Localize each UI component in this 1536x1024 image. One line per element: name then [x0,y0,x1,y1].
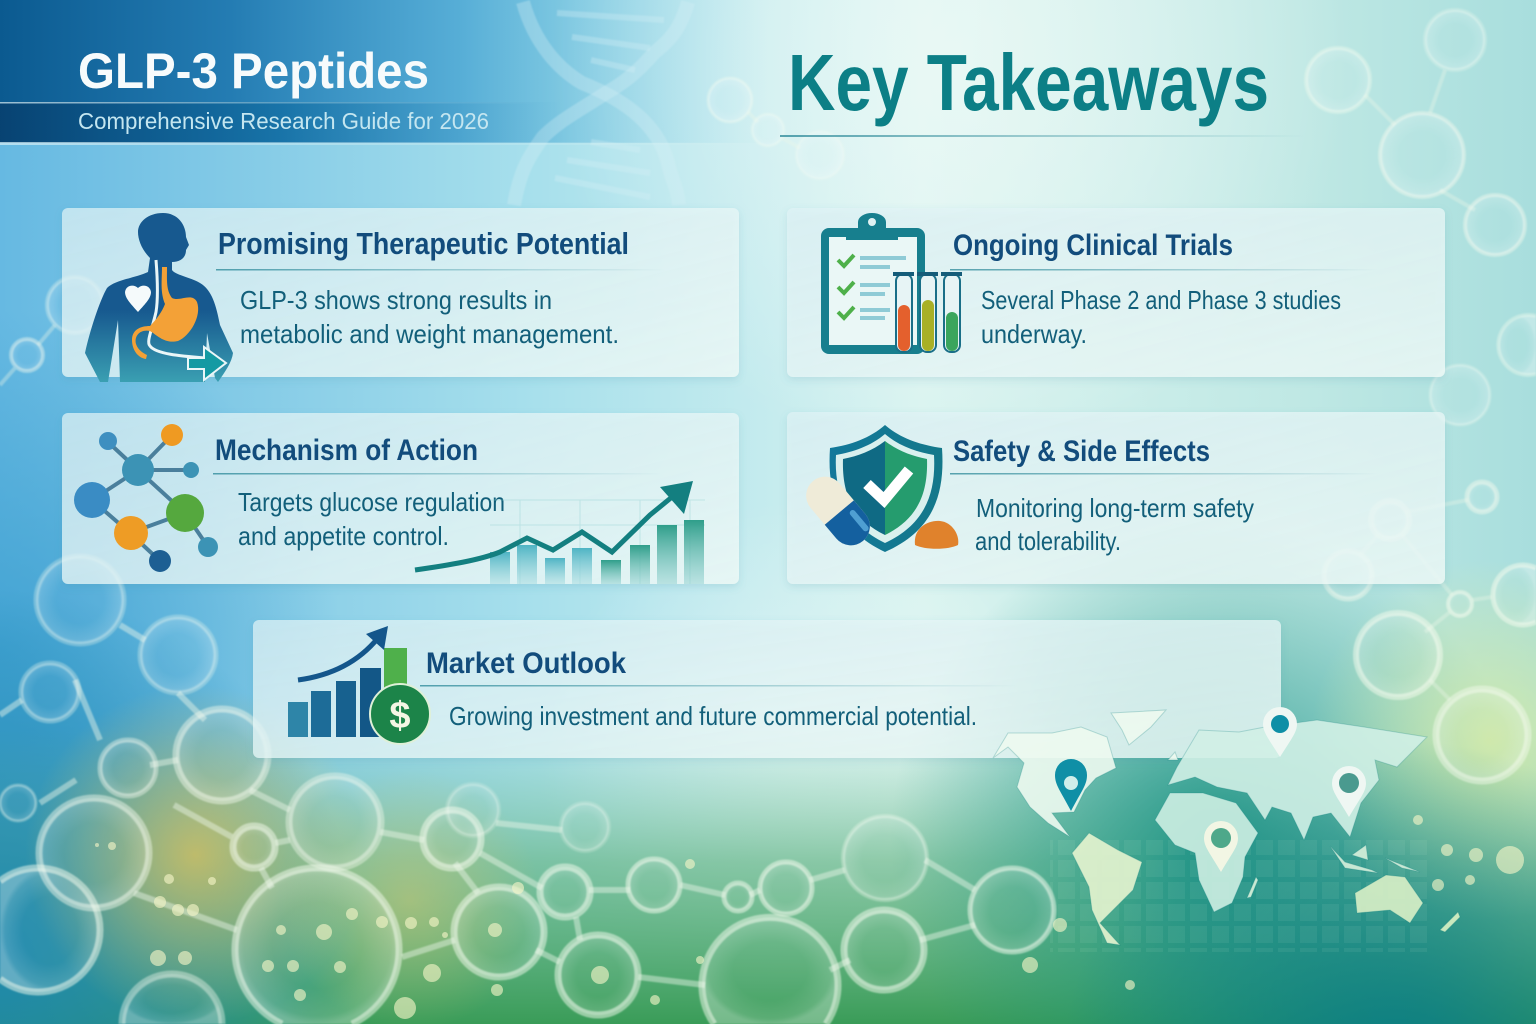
icon: bars, arrow and dollar coin: $ [389,695,411,737]
body text: Several Phase 2 and Phase 3 studies [981,285,1341,315]
heading: Ongoing Clinical Trials [953,229,1233,262]
heading: key takeaways: Key Takeaways [788,38,1269,127]
heading: Mechanism of Action [215,434,478,467]
body text: metabolic and weight management. [240,319,619,349]
pin: asia [1332,766,1366,817]
body text: and appetite control. [238,521,449,551]
body text: Monitoring long-term safety [976,493,1254,523]
panel: ongoing clinical trials [787,208,1445,377]
icon: clipboard and test tubes [821,213,962,354]
panel: promising therapeutic potential [62,208,739,382]
subtitle: Comprehensive Research Guide for 2026 [78,108,489,134]
world map with location pins [993,707,1460,952]
heading: Market Outlook [426,647,626,680]
body text: Targets glucose regulation [238,487,505,517]
icon: bars, arrow and dollar coin [288,626,430,744]
heading: Promising Therapeutic Potential [218,226,629,261]
panel: market outlook [253,620,1281,758]
pin: north america [1055,759,1087,811]
heading: Safety & Side Effects [953,435,1210,468]
panel: safety and side effects [787,412,1445,584]
main title: GLP-3 Peptides [78,43,429,99]
body text: GLP-3 shows strong results in [240,285,552,315]
bokeh speckles [95,815,1524,1019]
panel: mechanism of action [62,413,739,584]
DNA helix backdrop [514,2,688,205]
icon: shield and pills [798,425,958,553]
chart: rising bars and trend arrow [415,481,705,584]
body text: Growing investment and future commercial potential. [449,701,977,731]
pin: africa [1204,821,1238,872]
data grid behind map [1050,840,1430,952]
title banner [0,43,760,145]
body text: and tolerability. [975,526,1121,556]
icon: human torso with stomach [85,213,233,382]
pin: russia [1263,707,1297,757]
body text: underway. [981,319,1087,349]
icon: molecule [74,424,218,572]
